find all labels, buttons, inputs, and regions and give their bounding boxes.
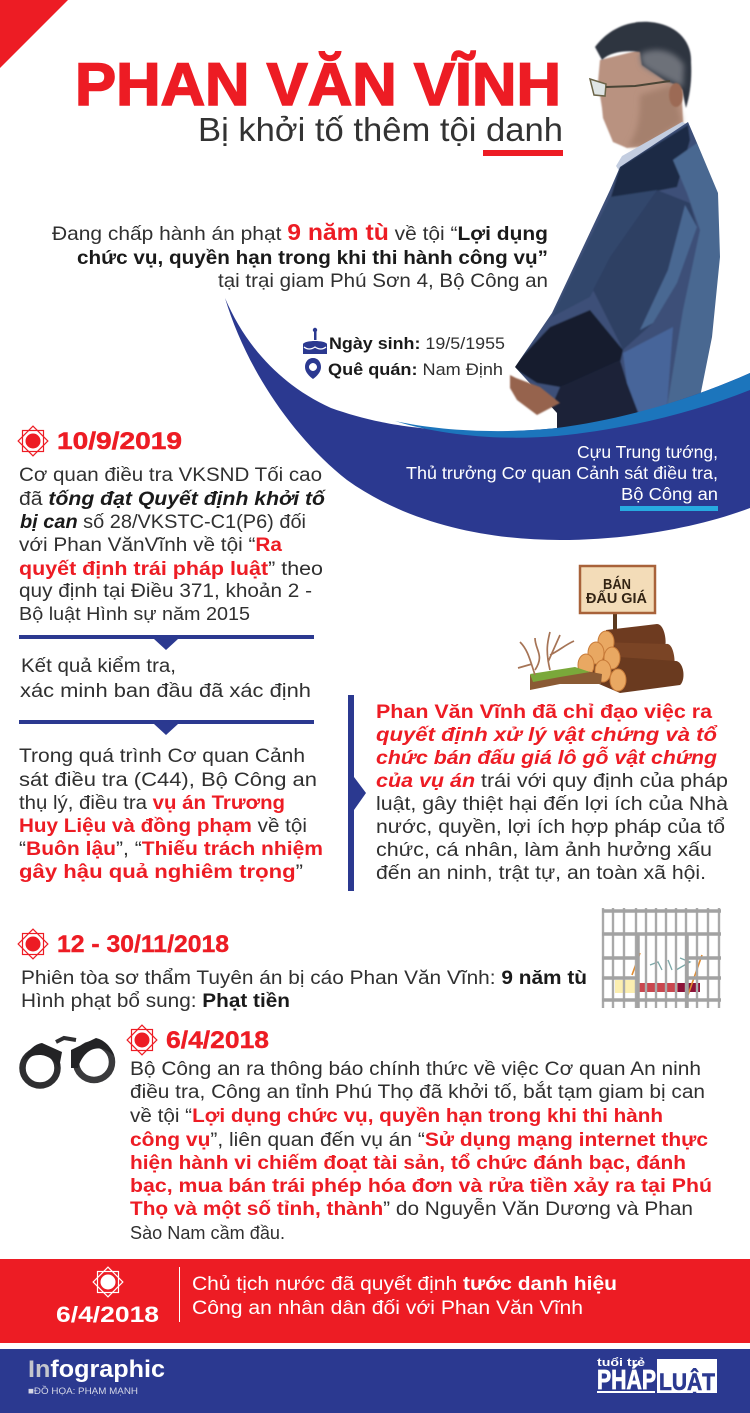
bottom log [585,655,683,693]
red corner triangle [0,0,68,68]
text block: first-instance verdict: Hình phạt bổ sung: Phạt tiền [21,991,290,1012]
position caption [406,442,718,504]
caption underline [620,506,718,511]
sign board [580,566,655,613]
text block: C44 investigation: thụ lý, điều tra vụ án Trương [19,793,285,814]
logo [597,1357,717,1396]
hometown: Quê quán: Nam Định [328,360,503,379]
text block: arrest announcement: Sào Nam cầm đầu. [130,1223,285,1243]
text block: indictment: quy định tại Điều 371, khoản 2 - [19,581,312,602]
sign post [613,612,617,634]
right panel [667,143,722,407]
banner text: Công an nhân dân đối với Phan Văn Vĩnh [192,1298,583,1319]
shirt collar [616,122,687,172]
text block: auction finding: luật, gây thiệt hại đến lợi ích của Nhà [376,794,728,815]
banner text: Chủ tịch nước đã quyết định tước danh hiệu [192,1274,617,1295]
wall scribble [650,958,690,970]
icon: sun marker 2018 trial [18,929,48,959]
sign text [586,576,648,607]
horizontal rails [602,911,721,1008]
intro text: tại trại giam Phú Sơn 4, Bộ Công an [218,270,548,292]
log ends [578,631,626,691]
blue crescent [225,298,750,540]
text block: indictment: đã tống đạt Quyết định khởi tố [19,489,327,510]
lower torso [552,362,638,428]
hair [595,22,691,108]
fallen trunk [530,669,602,690]
text block: C44 investigation: Trong quá trình Cơ quan Cảnh [19,746,305,767]
text block: C44 investigation: gây hậu quả nghiêm trọng ” [19,862,303,883]
text block: auction finding: Phan Văn Vĩnh đã chỉ đạo việc ra [376,702,712,723]
title: PHAN VĂN VĨNH [75,51,561,118]
text block: initial findings: xác minh ban đầu đã xác định [20,681,311,702]
position caption: Thủ trưởng Cơ quan Cảnh sát điều tra, [406,463,718,483]
credit: ■ĐỒ HỌA: PHẠM MẠNH [28,1385,138,1397]
text block: arrest announcement: Bộ Công an ra thông báo chính thức về việc Cơ quan An ninh [130,1059,701,1080]
hands [510,375,560,415]
text block: auction finding: quyết định xử lý vật chứng và tổ [376,725,717,746]
text block: C44 investigation: “Buôn lậu ”, “Thiếu trách nhiệm [19,839,323,860]
branches [518,632,574,675]
date 6/4/2018: 6/4/2018 [166,1027,269,1054]
icon: sun marker 6/4/2018 [127,1025,157,1055]
infographic label: Infographic [28,1356,165,1383]
icon: sun marker 2019 [18,426,48,456]
text block: auction finding: đến an ninh, trật tự, an toàn xã hội. [376,863,706,884]
lower right [622,327,674,412]
banner divider [179,1267,180,1322]
icon: white sun marker [93,1267,123,1297]
mattress [615,980,639,993]
text block: auction finding: của vụ án trái với quy định của pháp [376,771,728,792]
text block: indictment [19,465,327,624]
logo: LUẬT [659,1368,715,1396]
sleeve light [640,205,697,330]
middle log [597,642,675,680]
sticks [632,953,702,995]
text block: first-instance verdict: Phiên tòa sơ thẩm Tuyên án bị cáo Phan Văn Vĩnh: 9 năm tù [21,968,587,989]
text block: indictment: quyết định trái pháp luật ” theo [19,559,323,580]
hair grey [640,50,684,88]
text block: C44 investigation: sát điều tra (C44), Bộ Công an [19,770,317,791]
arrow divider 2 [19,720,314,735]
collar shade [610,125,690,200]
text block: auction finding [376,702,728,884]
intro text [52,219,548,292]
portrait photo [510,22,725,445]
subtitle: Bị khởi tố thêm tội danh [198,111,563,148]
text block: arrest announcement: bạc, mua bán trái phép hóa đơn và rửa tiền xảy ra tại Phú [130,1176,712,1197]
top log [606,624,666,660]
jacket [515,122,720,428]
cyan strip [395,373,750,438]
text block: indictment: với Phan VănVĩnh về tội “ Ra [19,535,282,556]
text block: arrest announcement: về tội “ Lợi dụng chức vụ, quyền hạn trong khi thi hành [130,1106,663,1127]
birth date: Ngày sinh: 19/5/1955 [329,334,505,353]
text block: auction finding: nước, quyền, lợi ích hợp pháp của tổ [376,817,725,838]
illustration: prison bars [602,908,721,1008]
subtitle underline [483,150,563,156]
text block: initial findings [20,656,311,702]
glasses [590,79,670,96]
arrow bar pointing right [348,695,366,891]
position caption: Cựu Trung tướng, [577,442,718,462]
logo: tuổi trẻ [597,1357,645,1369]
text block: arrest announcement: công vụ ”, liên quan đến vụ án “ Sử dụng mạng internet thực [130,1130,708,1151]
text block: indictment: bị can số 28/VKSTC-C1(P6) đối [20,512,306,533]
front panel [552,190,657,317]
text block: arrest announcement: điều tra, Công an tỉnh Phú Thọ đã khởi tố, bắt tạm giam bị can [130,1081,705,1103]
moss [530,667,590,682]
sign text: ĐẤU GIÁ [586,590,648,607]
bars [603,908,719,1008]
red banner [0,1259,750,1343]
footer [0,1349,750,1413]
date 10/9/2019: 10/9/2019 [57,428,182,455]
logo: PHÁP [597,1364,656,1395]
icon: handcuffs [22,1038,114,1086]
banner date: 6/4/2018 [56,1302,159,1327]
intro text: chức vụ, quyền hạn trong khi thi hành công vụ” [77,247,548,269]
sign text: BÁN [603,576,631,593]
text block: indictment: Cơ quan điều tra VKSND Tối cao [19,465,322,486]
arm [512,310,623,387]
illustration: auction sign and logs [518,566,683,693]
sleeve [593,190,697,350]
icon: location pin [305,358,321,379]
jacket base [516,122,716,412]
text block: arrest announcement: hiện hành vi chiếm đoạt tài sản, tổ chức đánh bạc, đánh [130,1153,686,1174]
text block: C44 investigation [19,746,323,883]
arrow divider 1 [19,635,314,650]
banner text [192,1274,617,1319]
position caption: Bộ Công an [621,484,718,504]
neck and face [598,50,683,148]
icon: birthday cake [303,328,327,354]
face shadow [628,85,682,146]
text block: auction finding: chức bán đấu giá lô gỗ vật chứng [376,747,717,769]
text block: first-instance verdict [21,968,587,1012]
text block: C44 investigation: Huy Liệu và đồng phạm về tội [19,816,307,837]
intro text: Đang chấp hành án phạt 9 năm tù về tội “Lợi dụng [52,219,548,245]
text block: initial findings: Kết quả kiểm tra, [21,656,176,677]
text block: indictment: Bộ luật Hình sự năm 2015 [19,604,250,624]
ear [669,83,683,107]
text block: arrest announcement [130,1059,712,1243]
date 12 - 30/11/2018: 12 - 30/11/2018 [57,931,229,958]
text block: auction finding: chức, cá nhân, làm ảnh hưởng xấu [376,840,712,861]
text block: arrest announcement: Thọ và một số tỉnh, thành ” do Nguyễn Văn Dương và Phan [130,1198,693,1220]
